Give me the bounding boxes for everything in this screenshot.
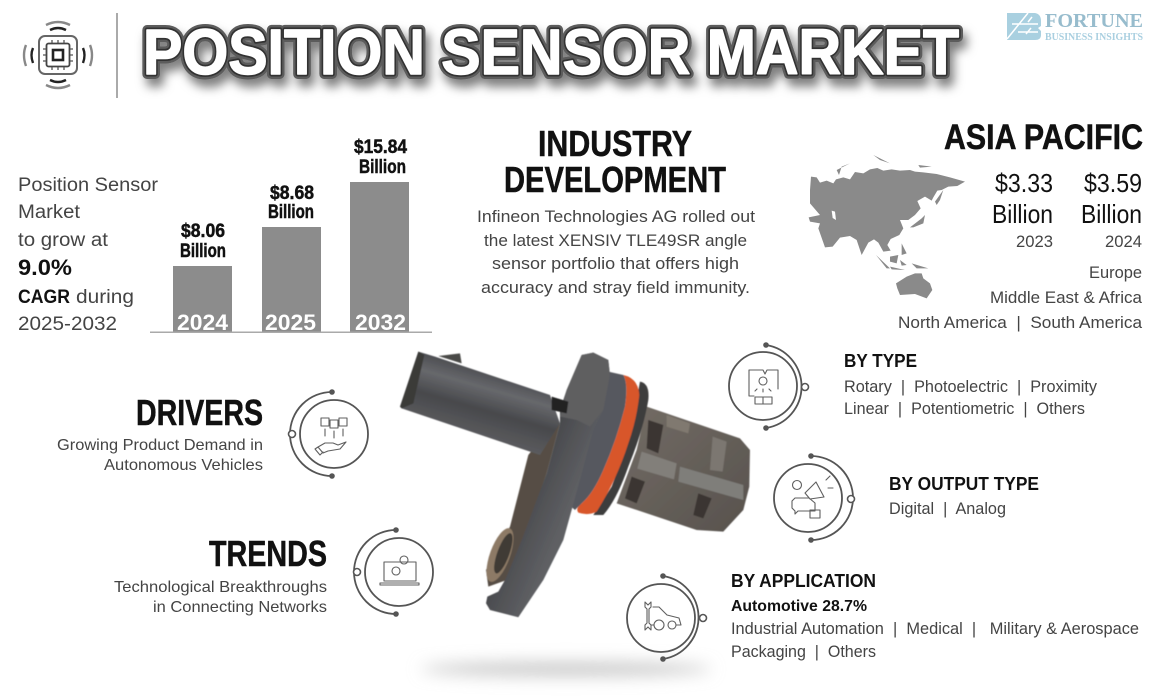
regional values: $3.59	[1084, 168, 1142, 198]
by application text	[731, 571, 1139, 661]
drivers text: DRIVERS	[136, 392, 263, 433]
header icon: sensor chip	[24, 22, 92, 88]
trends text: Technological Breakthroughs	[114, 579, 327, 596]
title: POSITION SENSOR MARKET	[143, 16, 959, 88]
trends text: in Connecting Networks	[153, 599, 327, 616]
industry development: the latest XENSIV TLE49SR angle	[484, 231, 747, 250]
growth statement	[18, 175, 159, 335]
by output type text: BY OUTPUT TYPE	[889, 474, 1039, 494]
growth statement: Market	[18, 202, 81, 223]
ground shadow	[421, 662, 711, 676]
by type text: Linear | Potentiometric | Others	[844, 400, 1085, 418]
industry development: sensor portfolio that offers high	[492, 254, 739, 273]
other regions list: North America | South America	[898, 313, 1143, 332]
by type text: BY TYPE	[844, 351, 917, 371]
icon: by output type	[774, 453, 854, 543]
bar chart: market size: Billion	[359, 157, 406, 178]
drivers text	[57, 392, 263, 474]
regional values: $3.33	[995, 168, 1053, 198]
regional values: 2023	[1016, 232, 1053, 251]
regional values: Billion	[992, 199, 1053, 229]
industry development: DEVELOPMENT	[504, 159, 726, 200]
logo: Fortune Business Insights: BUSINESS INSIGHTS	[1045, 31, 1143, 43]
header divider	[116, 13, 118, 98]
bar chart: market size: 2025	[265, 310, 316, 335]
trends text	[114, 533, 327, 616]
bar chart: market size: 2024	[177, 310, 229, 335]
growth statement: CAGR	[18, 287, 70, 308]
by application text: Packaging | Others	[731, 643, 876, 661]
other regions list: Europe	[1089, 263, 1142, 282]
growth statement: during	[76, 287, 134, 308]
drivers text: Autonomous Vehicles	[104, 457, 263, 474]
icon: by application	[627, 573, 706, 662]
growth statement: 2025-2032	[18, 314, 117, 335]
growth statement: to grow at	[18, 230, 109, 251]
map: Asia Pacific	[809, 155, 965, 298]
by output type text: Digital | Analog	[889, 500, 1006, 518]
other regions list	[898, 263, 1143, 332]
growth statement: 9.0%	[18, 255, 72, 280]
title: POSITION SENSOR MARKET	[143, 16, 959, 88]
drivers text: Growing Product Demand in	[57, 437, 263, 454]
by application text: BY APPLICATION	[731, 571, 876, 591]
other regions list: Middle East & Africa	[990, 288, 1143, 307]
icon: trends	[354, 527, 433, 617]
by application text: Industrial Automation | Medical | Military & Aerospace	[731, 620, 1139, 638]
trends text: TRENDS	[209, 533, 327, 574]
industry development: Infineon Technologies AG rolled out	[477, 207, 755, 226]
industry development: INDUSTRY	[538, 123, 692, 164]
icon: by type	[729, 342, 808, 431]
regional values	[992, 168, 1142, 251]
bar chart: market size: Billion	[268, 202, 314, 223]
bar chart: market size: $8.06	[181, 221, 225, 242]
bar chart: market size: 2032	[355, 310, 406, 335]
product photo: position sensor	[400, 352, 750, 617]
logo: Fortune Business Insights: FORTUNE	[1045, 10, 1143, 32]
by type text	[844, 351, 1098, 418]
bar chart: market size: $8.68	[270, 183, 314, 204]
logo: Fortune Business Insights	[1007, 10, 1143, 43]
title: POSITION SENSOR MARKET	[143, 16, 959, 88]
industry development: accuracy and stray field immunity.	[481, 278, 750, 297]
growth statement: Position Sensor	[18, 175, 159, 196]
by output type text	[889, 474, 1039, 518]
by application text: Automotive 28.7%	[731, 598, 867, 615]
regional values: 2024	[1105, 232, 1142, 251]
bar chart: market size: $15.84	[354, 137, 407, 158]
regional values: Billion	[1081, 199, 1142, 229]
industry development	[477, 123, 755, 297]
bar chart: market size	[150, 137, 432, 335]
by type text: Rotary | Photoelectric | Proximity	[844, 378, 1098, 396]
icon: drivers	[288, 389, 368, 479]
bar chart: market size: Billion	[180, 241, 226, 262]
